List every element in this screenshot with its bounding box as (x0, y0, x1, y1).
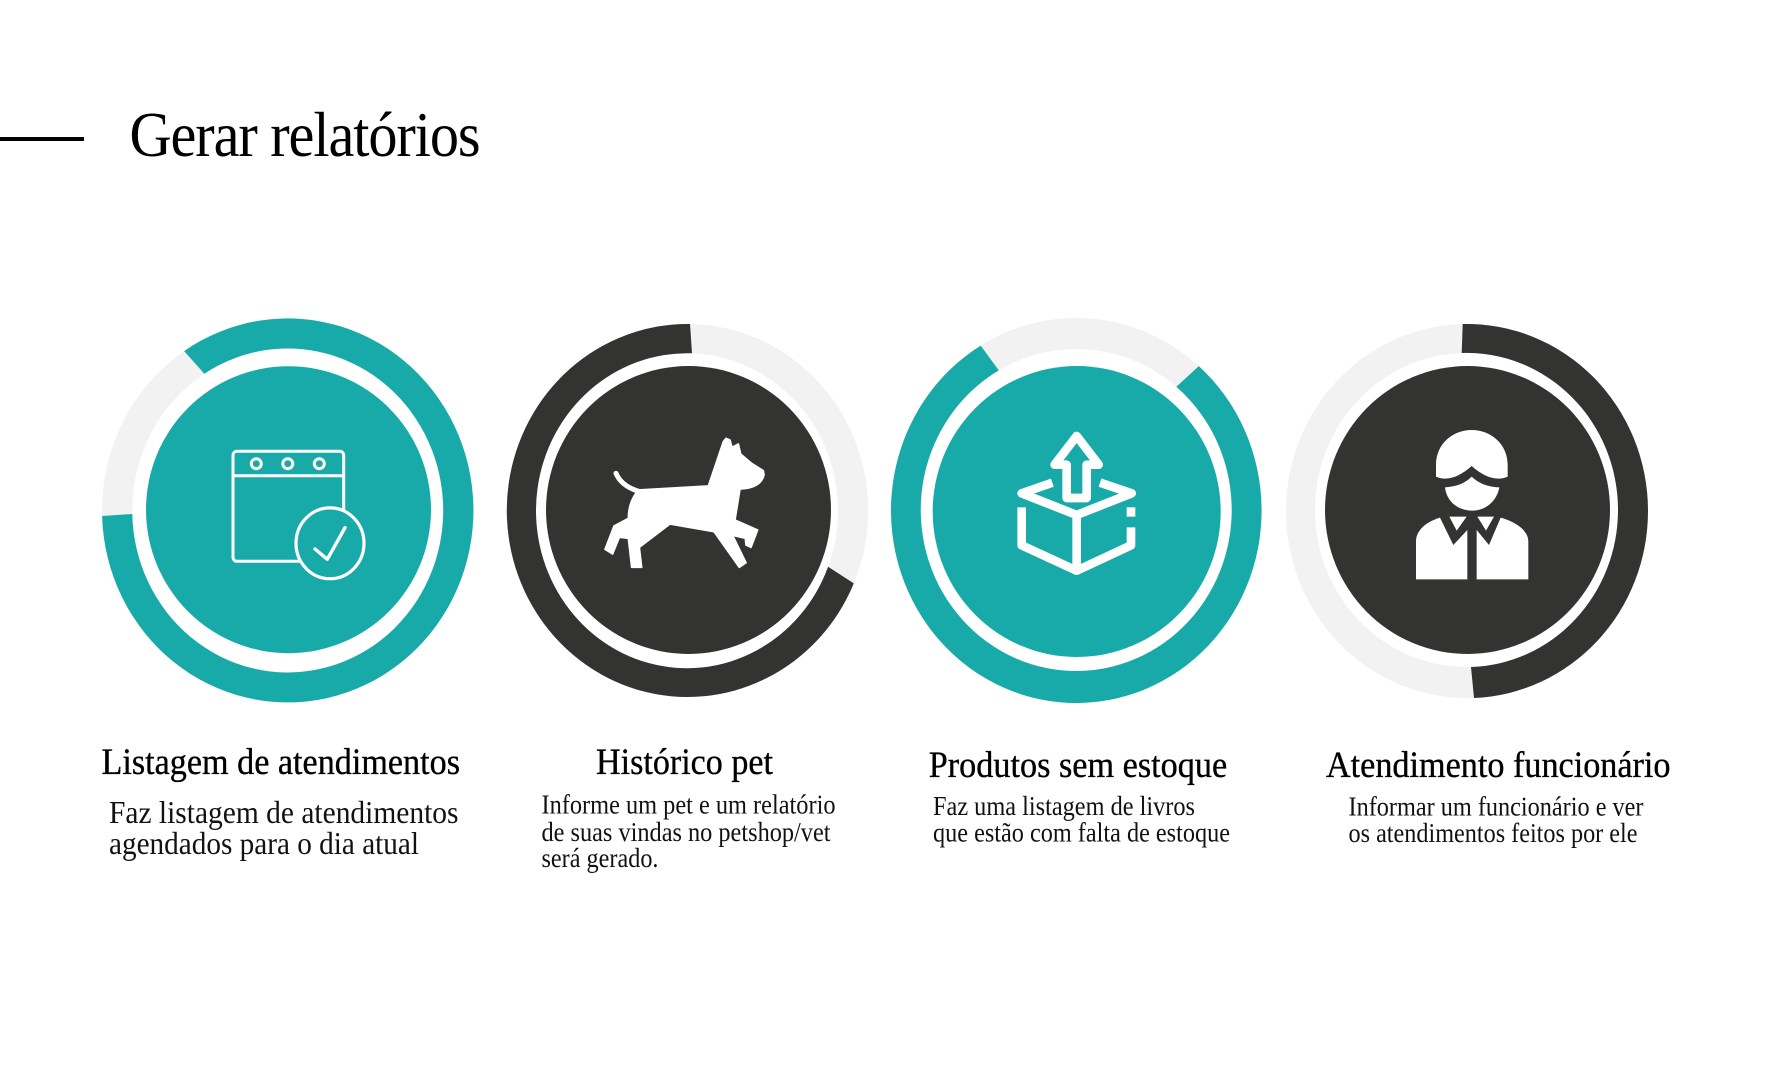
description: Faz uma listagem de livros (933, 791, 1195, 821)
icon: box with up arrow (1022, 436, 1132, 571)
description (933, 791, 1230, 848)
progress ring: dark (507, 324, 868, 697)
description: Informe um pet e um relatório (542, 790, 836, 820)
description (542, 790, 836, 873)
description: de suas vindas no petshop/vet (542, 817, 831, 847)
panel: atendimento funcionário (1286, 324, 1670, 848)
heading: Histórico pet (596, 742, 774, 783)
progress ring: dark (1286, 324, 1648, 698)
description: que estão com falta de estoque (933, 818, 1230, 848)
icon: running dog (605, 438, 764, 567)
description: será gerado. (542, 843, 658, 873)
panel: produtos sem estoque (891, 318, 1262, 848)
heading: Produtos sem estoque (929, 745, 1227, 786)
panel: listagem de atendimentos (102, 318, 473, 861)
disc: dark (546, 366, 831, 654)
disc: teal (146, 366, 431, 653)
description: Faz listagem de atendimentos (109, 795, 458, 830)
disc: teal (933, 366, 1221, 657)
description: Informar um funcionário e ver (1348, 792, 1644, 822)
description: agendados para o dia atual (109, 826, 419, 861)
progress ring: teal (102, 318, 473, 702)
description (1348, 792, 1644, 848)
description (109, 795, 458, 861)
heading: Atendimento funcionário (1326, 745, 1670, 786)
panel: histórico pet (507, 324, 868, 873)
icon: calendar with check (233, 451, 364, 579)
description: os atendimentos feitos por ele (1348, 818, 1638, 848)
disc: dark (1325, 366, 1610, 654)
title: Gerar relatórios (130, 99, 480, 170)
progress ring: teal (891, 318, 1262, 703)
title line accent (0, 137, 84, 141)
icon: employee (1416, 430, 1528, 579)
heading: Listagem de atendimentos (102, 742, 460, 783)
